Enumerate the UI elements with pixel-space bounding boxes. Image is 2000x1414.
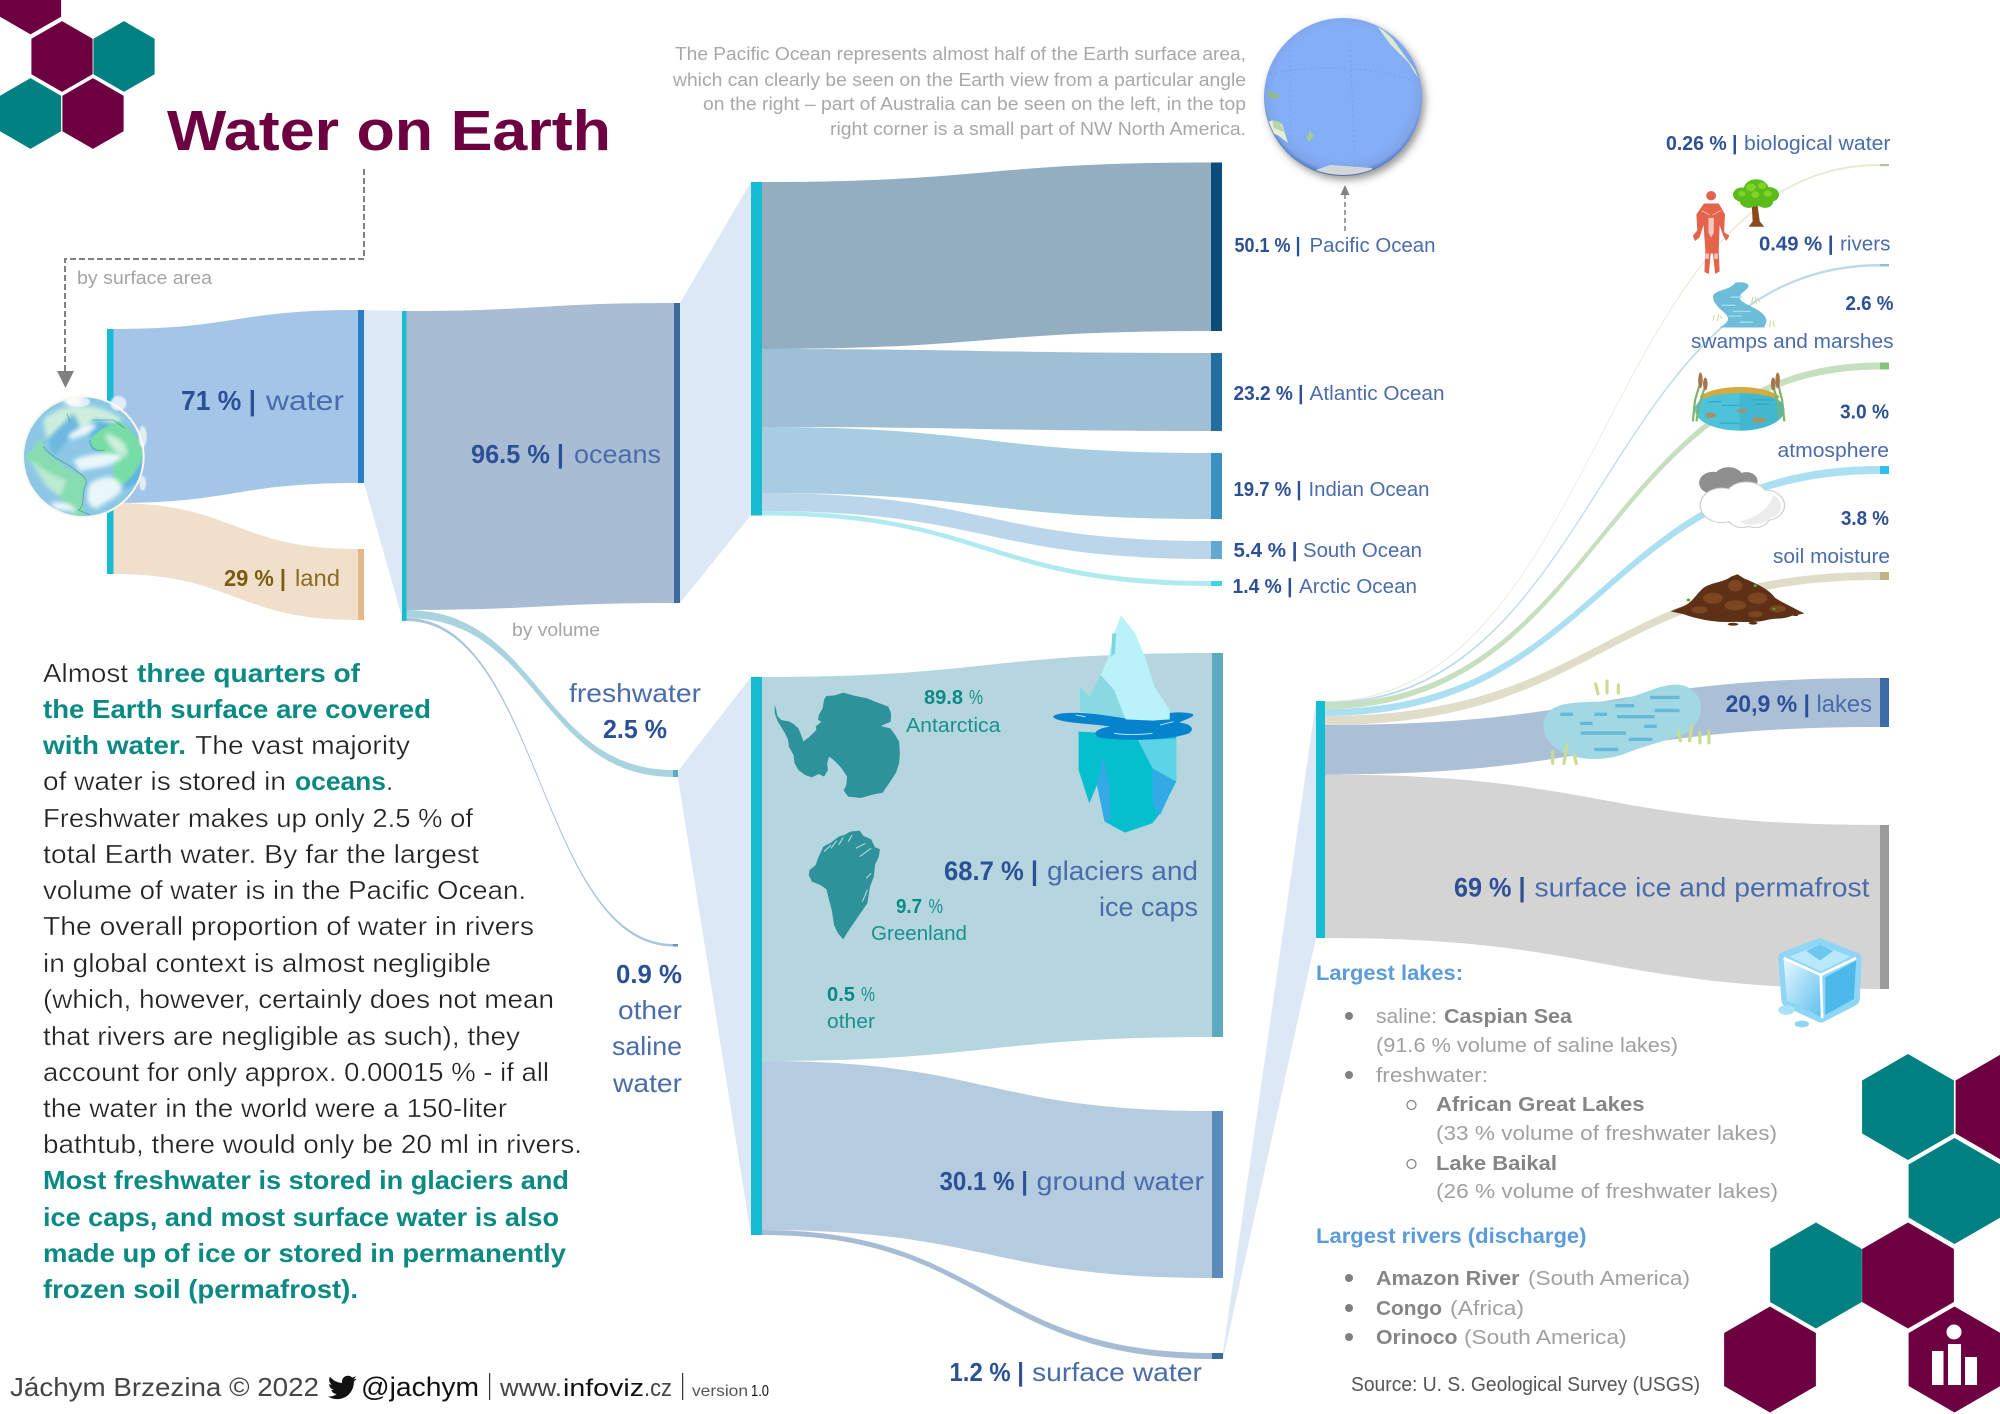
text: main paragraph: account for only approx. 0.00015 % - if all: [43, 1057, 549, 1087]
text: other saline water share: saline: [612, 1031, 682, 1061]
label: glaciers and ice caps: glaciers and: [1047, 856, 1198, 886]
text: main paragraph: with water.: [42, 730, 186, 760]
label: biological water: biological water: [1744, 133, 1891, 155]
funnel: surface water detail: [1223, 701, 1316, 1359]
labels: five oceans: 23.2 % |: [1234, 383, 1304, 405]
label: by surface area: by surface area: [77, 268, 213, 288]
icon: clouds: [1699, 467, 1785, 528]
text: Pacific Ocean note: which can clearly be seen on the Earth view from a particular angle: [672, 70, 1246, 90]
labels: five oceans: Pacific Ocean: [1310, 235, 1436, 257]
text: main paragraph: [42, 658, 582, 1304]
text: main paragraph: Almost: [43, 658, 129, 688]
text: main paragraph: ice caps, and most surface water is also: [43, 1202, 559, 1232]
text: main paragraph: the Earth surface are covered: [43, 694, 431, 724]
funnel: freshwater detail: [678, 677, 751, 1235]
text: main paragraph: frozen soil (permafrost).: [43, 1274, 358, 1304]
icon: Greenland: [809, 831, 880, 939]
list: largest rivers: Amazon River: [1376, 1268, 1520, 1290]
decoration: top-left hexagons: [0, 0, 155, 149]
list: largest rivers: Largest rivers (discharge): [1316, 1225, 1586, 1248]
text: Pacific Ocean note: on the right – part of Australia can be seen on the left, in the top: [703, 94, 1246, 114]
label: swamps and marshes: [1691, 293, 1894, 353]
list: largest lakes: [1316, 962, 1778, 1203]
labels: glaciers breakdown: %: [928, 896, 943, 918]
labels: glaciers breakdown: 0.5: [827, 984, 855, 1006]
labels: glaciers breakdown: 89.8: [924, 687, 963, 709]
labels: five oceans: [1232, 235, 1444, 598]
labels: five oceans: Atlantic Ocean: [1310, 383, 1444, 405]
label: soil moisture: 3.8 %: [1841, 508, 1889, 530]
icon: tree: [1733, 179, 1779, 227]
text: other saline water share: water: [612, 1068, 682, 1098]
label: glaciers and ice caps: ice caps: [1099, 892, 1198, 922]
text: main paragraph: that rivers are negligible as such), they: [43, 1021, 520, 1051]
list: largest rivers: (South America): [1528, 1268, 1690, 1290]
icon: infoviz logo: [1932, 1324, 1977, 1385]
oceans & area labels: 71 % |: [181, 385, 256, 416]
arrow: dashed from title to earth: [57, 169, 364, 388]
sankey: freshwater split: [751, 653, 1223, 1359]
text: other saline water share: other: [618, 995, 682, 1025]
text: main paragraph: .: [386, 766, 393, 796]
list: largest lakes: saline:: [1376, 1006, 1437, 1028]
list: largest rivers: (South America): [1464, 1327, 1626, 1349]
icon: swamp: [1693, 372, 1784, 431]
icon: lake: [1543, 681, 1709, 763]
labels: glaciers breakdown: %: [969, 687, 983, 709]
text: main paragraph: (which, however, certainly does not mean: [43, 984, 554, 1014]
label: lakes: 20,9 % |: [1726, 691, 1810, 718]
icon: Pacific globe: [1264, 18, 1422, 180]
label: rivers: [1759, 234, 1890, 256]
footer: credits: infoviz: [563, 1375, 644, 1402]
text: main paragraph: The vast majority: [195, 730, 410, 760]
arrow: dashed to globe: [1340, 185, 1350, 231]
icon: Antarctica: [775, 693, 900, 798]
list: largest lakes: (91.6 % volume of saline lakes): [1376, 1035, 1678, 1057]
labels: five oceans: 1.4 % |: [1232, 576, 1292, 598]
label: rivers: 0.49 % |: [1759, 234, 1834, 256]
text: main paragraph: three quarters of: [137, 658, 360, 688]
label: rivers: rivers: [1840, 234, 1890, 256]
text: Pacific Ocean note: right corner is a small part of NW North America.: [830, 119, 1246, 139]
label: surface ice and permafrost: 69 % |: [1454, 872, 1526, 902]
oceans & area labels: 96.5 % |: [471, 439, 564, 469]
footer: credits: 1.0: [751, 1383, 769, 1400]
text: main paragraph: the water in the world were a 150-liter: [43, 1093, 507, 1123]
text: other saline water share: 0.9 %: [616, 959, 682, 989]
list: largest lakes: (26 % volume of freshwater lakes): [1436, 1181, 1778, 1203]
list: largest rivers: [1316, 1225, 1690, 1349]
footer: credits: @jachym: [361, 1372, 479, 1402]
label: ground water: ground water: [1036, 1166, 1204, 1196]
list: largest rivers: Orinoco: [1376, 1327, 1458, 1349]
label: glaciers and ice caps: [944, 856, 1198, 922]
label: by volume: by volume: [512, 620, 600, 640]
label: atmosphere: atmosphere: [1778, 440, 1889, 462]
title: Water on Earth: [167, 99, 611, 163]
text: Pacific Ocean note: [672, 44, 1246, 139]
sankey: five oceans: [751, 162, 1222, 586]
oceans & area labels: 29 % |: [224, 565, 286, 591]
list: largest lakes: (33 % volume of freshwater lakes): [1436, 1123, 1777, 1145]
icon: soil pile: [1671, 574, 1804, 626]
footer: credits: .cz: [644, 1375, 672, 1402]
text: main paragraph: Freshwater makes up only 2.5 % of: [43, 803, 474, 833]
list: largest lakes: Largest lakes:: [1316, 962, 1463, 985]
label: lakes: [1726, 691, 1872, 718]
oceans & area labels: [181, 385, 661, 591]
text: freshwater share: freshwater: [569, 678, 701, 708]
label: swamps and marshes: 2.6 %: [1846, 293, 1894, 315]
list: largest rivers: (Africa): [1450, 1298, 1524, 1320]
icon: river: [1713, 282, 1774, 327]
icon: iceberg: [1053, 615, 1193, 833]
labels: five oceans: 19.7 % |: [1234, 479, 1302, 501]
text: main paragraph: total Earth water. By far the largest: [43, 839, 480, 869]
icon: earth: [20, 393, 147, 520]
label: surface water: [950, 1357, 1202, 1387]
label: lakes: lakes: [1816, 691, 1872, 718]
decoration: bottom-right hexagons: [1724, 1054, 2000, 1412]
labels: five oceans: South Ocean: [1303, 540, 1422, 562]
label: atmosphere: [1778, 402, 1889, 462]
labels: glaciers breakdown: other: [827, 1011, 875, 1033]
label: surface ice and permafrost: surface ice and permafrost: [1534, 872, 1870, 902]
label: atmosphere: 3.0 %: [1840, 402, 1889, 424]
label: biological water: 0.26 % |: [1666, 133, 1738, 155]
footer: credits: [10, 1372, 769, 1402]
text: main paragraph: The overall proportion of water in rivers: [43, 911, 534, 941]
text: main paragraph: in global context is almost negligible: [43, 948, 491, 978]
text: main paragraph: bathtub, there would only be 20 ml in rivers.: [43, 1129, 582, 1159]
text: main paragraph: made up of ice or stored in permanently: [43, 1238, 567, 1268]
label: soil moisture: soil moisture: [1773, 546, 1890, 568]
labels: glaciers breakdown: Antarctica: [906, 715, 1001, 737]
labels: five oceans: Arctic Ocean: [1299, 576, 1417, 598]
labels: five oceans: Indian Ocean: [1308, 479, 1430, 501]
text: freshwater share: 2.5 %: [603, 714, 667, 744]
list: largest lakes: freshwater:: [1376, 1065, 1488, 1087]
oceans & area labels: water: [265, 385, 344, 416]
label: biological water: [1666, 133, 1891, 155]
label: surface water: 1.2 % |: [950, 1357, 1024, 1387]
text: other saline water share: [612, 959, 682, 1098]
label: ground water: [940, 1166, 1204, 1196]
text: main paragraph: oceans: [295, 766, 386, 796]
sankey: oceans by volume: [402, 303, 680, 946]
text: source: Source: U. S. Geological Survey (USGS): [1351, 1374, 1700, 1396]
text: main paragraph: of water is stored in: [43, 766, 286, 796]
labels: glaciers breakdown: 9.7: [896, 896, 922, 918]
list: largest lakes: African Great Lakes: [1436, 1094, 1644, 1116]
labels: five oceans: 5.4 % |: [1234, 540, 1298, 562]
labels: glaciers breakdown: %: [861, 984, 875, 1006]
footer: credits: version: [692, 1383, 748, 1400]
label: glaciers and ice caps: 68.7 % |: [944, 856, 1038, 886]
funnel: water to oceans: [364, 310, 403, 621]
labels: glaciers breakdown: Greenland: [871, 923, 967, 945]
label: soil moisture: [1773, 508, 1890, 568]
list: largest lakes: Caspian Sea: [1444, 1006, 1573, 1028]
list: largest rivers: Congo: [1376, 1298, 1442, 1320]
label: swamps and marshes: swamps and marshes: [1691, 331, 1894, 353]
labels: five oceans: 50.1 % |: [1234, 235, 1300, 257]
labels: glaciers breakdown: [827, 687, 1001, 1033]
footer: credits: Jáchym Brzezina © 2022: [10, 1372, 319, 1402]
sankey: surface area split: [107, 310, 364, 620]
label: ground water: 30.1 % |: [940, 1166, 1028, 1196]
text: freshwater share: [569, 678, 701, 744]
funnel: oceans detail: [680, 182, 751, 603]
oceans & area labels: oceans: [574, 439, 661, 469]
list: largest lakes: Lake Baikal: [1436, 1153, 1557, 1175]
text: main paragraph: volume of water is in the Pacific Ocean.: [43, 875, 526, 905]
text: Pacific Ocean note: The Pacific Ocean represents almost half of the Earth surface area,: [675, 44, 1246, 64]
text: main paragraph: Most freshwater is stored in glaciers and: [43, 1165, 569, 1195]
icon: human body: [1693, 191, 1729, 274]
icon: ice cube: [1778, 938, 1862, 1027]
oceans & area labels: land: [295, 565, 340, 591]
footer: credits: www.: [499, 1375, 562, 1402]
label: surface water: surface water: [1032, 1357, 1202, 1387]
sankey: surface water split: [1316, 164, 1889, 989]
